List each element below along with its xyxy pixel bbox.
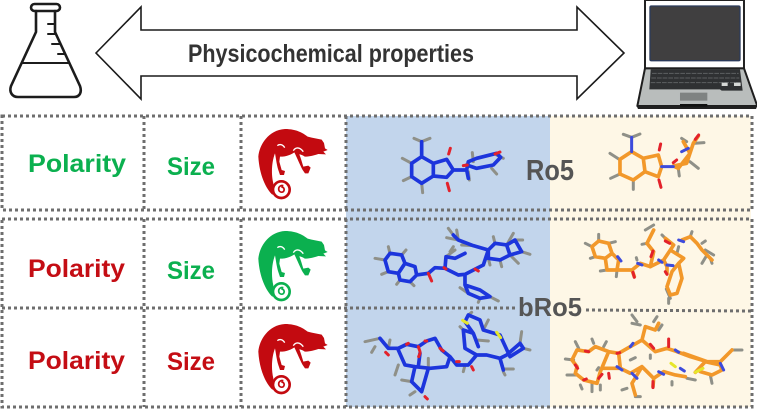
icon: laptop	[637, 0, 757, 109]
icon: red chameleon row 1	[258, 129, 328, 198]
molecule: bRo5 blue medium	[375, 228, 530, 302]
molecule: Ro5 orange conformer	[610, 134, 704, 189]
row 3 label: polarity unfavourable: Polarity	[28, 347, 125, 375]
molecule: bRo5 blue large	[365, 312, 530, 399]
label: bRo5: bRo5	[518, 292, 582, 322]
label: Ro5: Ro5	[526, 155, 574, 187]
row 1 label: polarity favourable: Polarity	[28, 150, 126, 178]
icon: red chameleon row 3	[258, 324, 328, 393]
arrow: double-headed physicochemical arrow	[96, 7, 624, 99]
icon: green chameleon row 2	[258, 231, 328, 300]
icon: conical flask	[10, 4, 81, 97]
row 3 label: size unfavourable: Size	[167, 348, 215, 376]
molecule: bRo5 orange large	[565, 315, 742, 397]
heading: physicochemical properties: Physicochemical properties	[188, 40, 474, 68]
panel: cream molecule background	[550, 116, 751, 407]
molecule: Ro5 blue conformer	[402, 138, 503, 193]
molecule: bRo5 orange medium	[585, 225, 714, 303]
row 2 label: size favourable: Size	[167, 257, 215, 285]
dotted table grid	[2, 116, 752, 407]
panel: blue molecule background	[346, 116, 550, 407]
row 2 label: polarity unfavourable: Polarity	[28, 255, 125, 283]
row 1 label: size favourable: Size	[167, 153, 215, 181]
